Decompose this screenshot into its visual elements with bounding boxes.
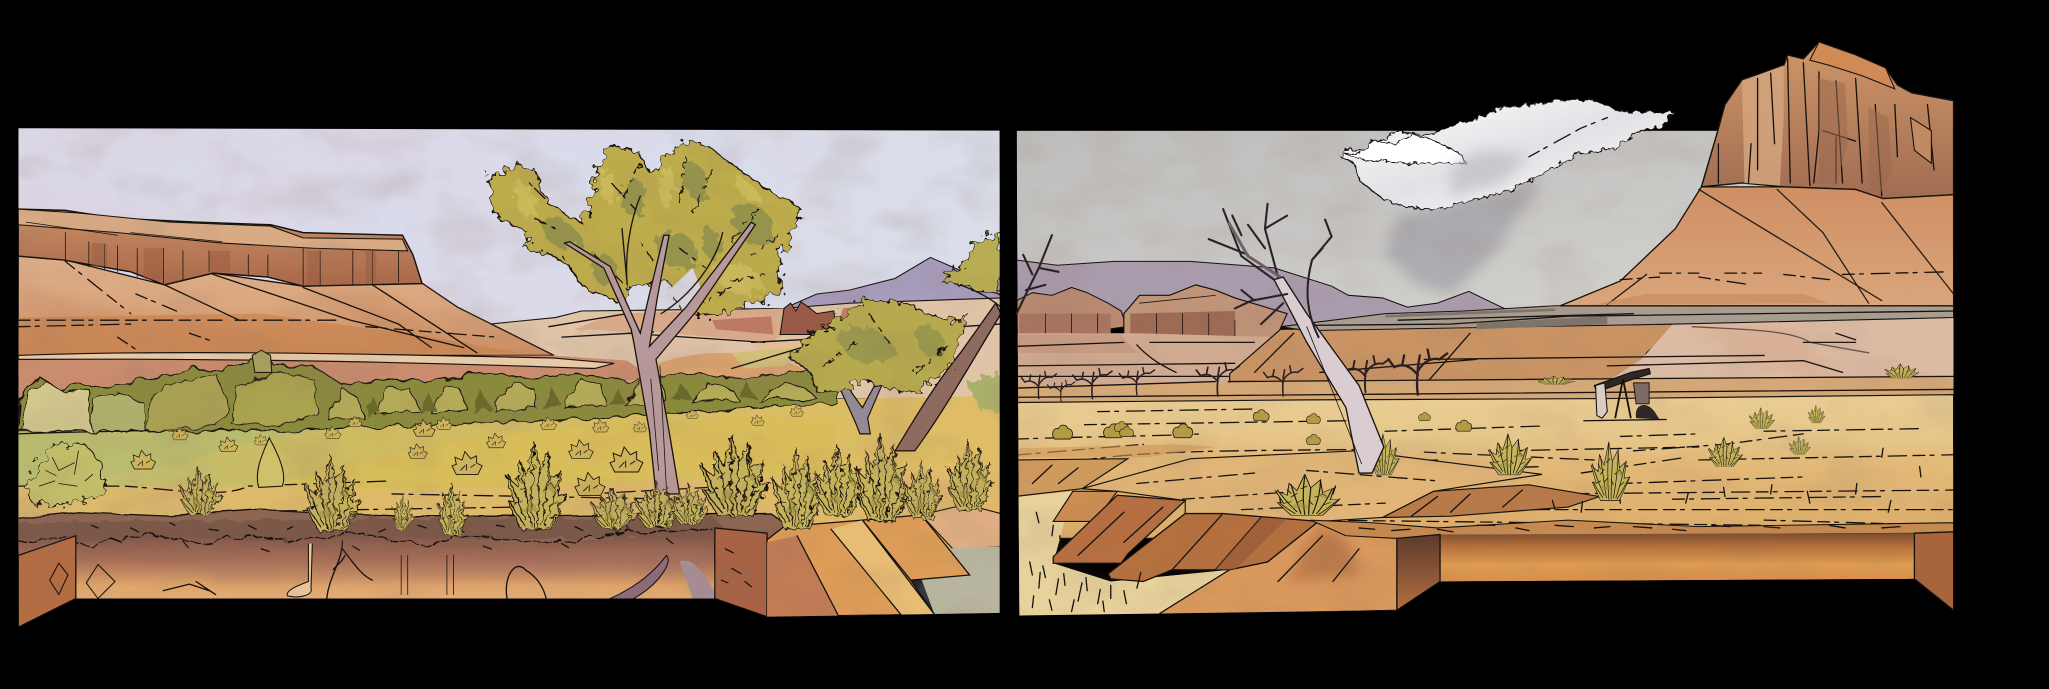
main mesa cliff [18, 209, 422, 286]
trench left wall [1397, 534, 1440, 610]
watercolor mottling left [18, 301, 1002, 625]
oil pumpjack [1584, 369, 1666, 421]
lower strata band [18, 355, 653, 405]
field shrubs [131, 406, 804, 495]
peach rock [926, 506, 1000, 548]
left green shrub [28, 444, 106, 505]
cross section slanted strata [767, 515, 970, 617]
lower bench band [1017, 376, 1954, 408]
grass tufts [1030, 448, 1921, 612]
trench back wall [1440, 533, 1914, 582]
pale bench right [1607, 318, 1954, 382]
ground lines [1017, 409, 1954, 525]
grey-green water [922, 546, 1000, 614]
rock slabs [1053, 491, 1117, 521]
main mesa slope [18, 256, 554, 355]
rain shower [1385, 179, 1542, 294]
roots [162, 540, 714, 598]
field [18, 396, 1001, 549]
distant mountains [784, 256, 1000, 308]
right wall [1914, 532, 1954, 610]
dry shrubs [1053, 364, 1919, 515]
sky gap [672, 268, 700, 310]
dark terraces [1014, 459, 1128, 497]
orange bench [1229, 324, 1672, 383]
subsoil [18, 533, 715, 614]
dead tree [1209, 204, 1384, 473]
cloud [1341, 99, 1675, 210]
left buttes [1013, 287, 1126, 342]
cone shrubs [257, 438, 284, 487]
left fold [18, 536, 76, 627]
right rim [1311, 520, 1954, 538]
desert foreground [1017, 395, 1954, 538]
center divider [1000, 128, 1015, 625]
soil top layer [18, 508, 783, 544]
canopy [490, 141, 798, 316]
tree 1 [490, 141, 798, 494]
red rock spires [780, 302, 836, 335]
sky and scene clipped [1013, 131, 1958, 617]
left edge dead tree [1017, 235, 1058, 314]
panel: right degraded landscape [1013, 42, 1958, 617]
distant mesas and benches [490, 298, 1001, 399]
foreground shrubs [179, 433, 994, 536]
brown slab [1383, 485, 1599, 517]
far dead trees row [1021, 350, 1447, 401]
mid strata left [1017, 333, 1278, 392]
grey strata [1281, 303, 1954, 331]
sky [18, 128, 1001, 376]
pale grass wedge [1017, 491, 1230, 615]
mottling right [1017, 314, 1958, 617]
trunk and branches [565, 222, 755, 494]
mesa tower [1560, 42, 1954, 306]
right fold [715, 528, 767, 617]
panel: left healthy landscape [18, 128, 1002, 627]
purple subsoil shadow [218, 570, 304, 582]
tower talus slope [1560, 187, 1954, 306]
tree 2 [791, 233, 1001, 451]
distant mountains [1017, 260, 1507, 327]
sky [1016, 130, 1772, 308]
tree line [18, 350, 836, 431]
cross section slope [1156, 521, 1397, 615]
